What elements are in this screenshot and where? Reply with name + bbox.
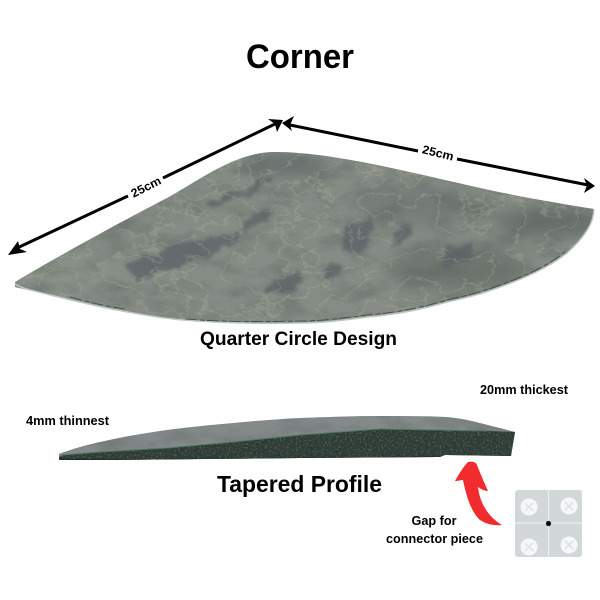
dark cut face xyxy=(59,416,515,460)
side profile silhouette xyxy=(59,416,515,460)
panel: quarter circle shelf photo xyxy=(14,152,595,324)
glass edge xyxy=(15,209,594,323)
label: gap for connector piece: connector piece xyxy=(386,532,483,546)
icon: connector piece xyxy=(515,490,582,557)
stone base xyxy=(15,152,594,323)
label: gap for connector piece: Gap for xyxy=(412,514,457,528)
stone texture xyxy=(16,152,594,322)
label: 20mm thickest: 20mm thickest xyxy=(480,383,569,397)
caption: tapered profile: Tapered Profile xyxy=(217,471,382,497)
label: 4mm thinnest: 4mm thinnest xyxy=(26,414,110,428)
arrow: red curved pointer to gap xyxy=(455,462,502,525)
label: gap for connector piece xyxy=(386,514,483,546)
arrow: right 25cm dimension xyxy=(282,116,595,193)
dimension label: right 25cm: 25cm xyxy=(421,142,455,164)
dimension label: left 25cm: 25cm xyxy=(129,173,163,201)
arrow: left 25cm dimension xyxy=(8,119,283,255)
panel: tapered side profile photo xyxy=(59,416,515,460)
title: Corner xyxy=(246,38,354,76)
caption: quarter circle design: Quarter Circle Design xyxy=(200,329,397,350)
